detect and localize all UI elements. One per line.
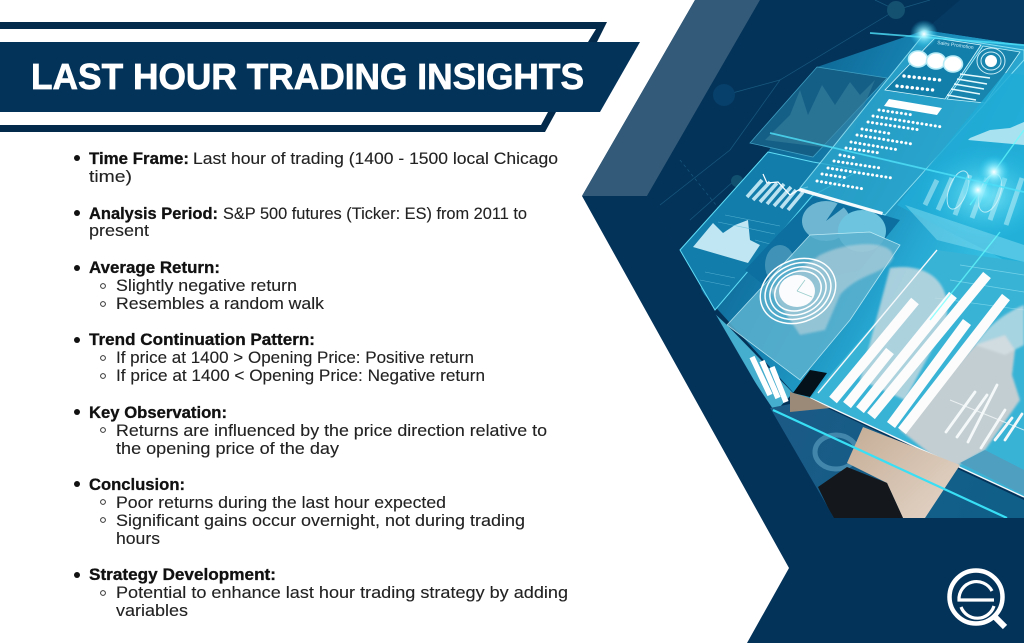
lighter slanted side panel bbox=[582, 0, 760, 196]
light streaks and glows bbox=[770, 20, 1024, 320]
sales promotion dashboard panel: Sales Promotion bbox=[937, 40, 974, 51]
section: Strategy Development: Strategy Development: bbox=[89, 566, 276, 584]
section: Average Return: Average Return: bbox=[89, 259, 220, 277]
section: Key Observation: Returns are influenced by the price direction relative to bbox=[116, 422, 547, 440]
section: Average Return: Slightly negative return bbox=[116, 277, 297, 295]
title banner bbox=[0, 22, 640, 132]
section: Key Observation: the opening price of the day bbox=[116, 440, 340, 458]
section: Strategy Development: Potential to enhance last hour trading strategy by adding bbox=[116, 584, 568, 602]
ring dial panel bbox=[727, 232, 900, 380]
small left bars and dark tablet corner bbox=[716, 314, 827, 408]
dim waveform panel bbox=[750, 67, 887, 157]
section: Time Frame: Last hour of trading (1400 - 1500 local Chicago bbox=[193, 150, 558, 168]
section: Key Observation: Key Observation: bbox=[89, 404, 227, 422]
section: Trend Continuation Pattern bbox=[74, 331, 485, 385]
section: Time Frame bbox=[74, 150, 558, 186]
sales promotion dashboard panel bbox=[798, 34, 1024, 215]
section: Conclusion: Significant gains occur overnight, not during trading bbox=[116, 512, 525, 530]
section: Trend Continuation Pattern: If price at 1400 > Opening Price: Positive return bbox=[116, 349, 474, 367]
banner top stripe bbox=[0, 22, 607, 42]
network nodes bbox=[713, 1, 905, 187]
section: Analysis Period: present bbox=[89, 222, 149, 240]
section: Conclusion: hours bbox=[116, 530, 160, 548]
section: Trend Continuation Pattern: Trend Continuation Pattern: bbox=[89, 331, 315, 349]
lower-left line and area chart panel bbox=[680, 152, 860, 310]
banner main band bbox=[0, 42, 640, 112]
section: Strategy Development: variables bbox=[116, 602, 188, 620]
section: Average Return bbox=[74, 259, 325, 313]
section: Analysis Period: Analysis Period: bbox=[89, 205, 218, 223]
section: Key Observation bbox=[74, 404, 547, 458]
section: Conclusion bbox=[74, 476, 525, 548]
section: Conclusion: Conclusion: bbox=[89, 476, 185, 494]
banner bottom stripe bbox=[0, 112, 556, 132]
title: LAST HOUR TRADING INSIGHTS bbox=[31, 56, 584, 97]
section: Analysis Period: S&P 500 futures (Ticker: ES) from 2011 to bbox=[223, 205, 527, 223]
large white bar chart panel bbox=[810, 250, 1024, 505]
section: Conclusion: Poor returns during the last hour expected bbox=[116, 494, 446, 512]
section: Strategy Development bbox=[74, 566, 568, 620]
section: Average Return: Resembles a random walk bbox=[116, 295, 325, 313]
background: dark navy chevron shape bbox=[582, 0, 1024, 643]
section: Trend Continuation Pattern: If price at 1400 < Opening Price: Negative return bbox=[116, 367, 485, 385]
photo: hands on holographic financial dashboards bbox=[640, 0, 1024, 520]
right data panel with glowing highlights bbox=[897, 73, 1024, 270]
section: Time Frame: time) bbox=[89, 168, 132, 186]
pie chart panel bbox=[745, 197, 900, 290]
lower area, wrist, sleeve and cyan line bbox=[770, 392, 1024, 518]
logo: SQ magnifier mark bbox=[950, 570, 1005, 627]
section: Time Frame: Time Frame: bbox=[89, 150, 189, 168]
section: Analysis Period bbox=[74, 205, 527, 240]
